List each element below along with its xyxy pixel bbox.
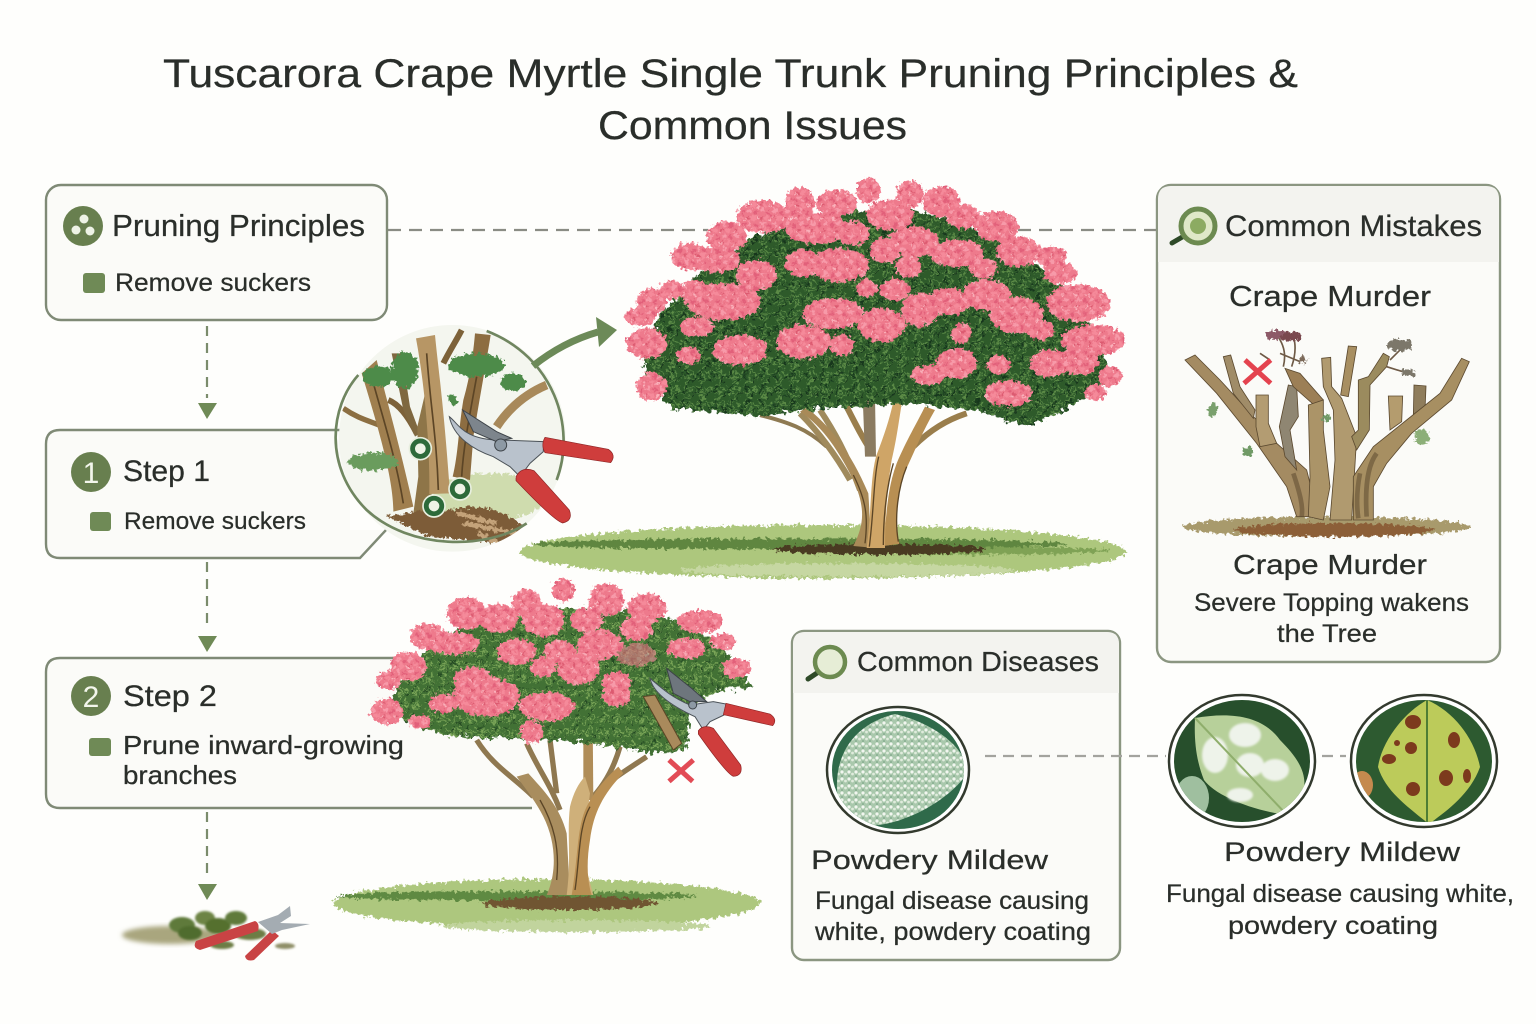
right description: Fungal disease causing white, bbox=[1166, 880, 1514, 908]
right description bbox=[1166, 880, 1514, 940]
red x mark bbox=[669, 760, 693, 781]
disease name: Powdery Mildew bbox=[811, 845, 1049, 875]
disease photo: leaf spot bbox=[1350, 695, 1498, 829]
dashed connector: diseases bbox=[985, 755, 1166, 757]
canopy flower clusters bbox=[373, 582, 748, 740]
ground: grass bbox=[520, 525, 1127, 578]
dashed connector: leaf to leaf bbox=[1322, 755, 1346, 757]
dashed connector: tree to mistakes bbox=[1018, 229, 1156, 231]
bullet square bbox=[90, 512, 111, 531]
heading: Common Mistakes bbox=[1225, 210, 1482, 243]
header band bbox=[1158, 186, 1499, 262]
bullet square bbox=[89, 738, 111, 756]
right description: powdery coating bbox=[1228, 912, 1438, 940]
description: white, powdery coating bbox=[814, 918, 1091, 946]
arrow: inset to tree bbox=[533, 317, 617, 366]
panel: step 2 bbox=[46, 658, 540, 808]
step 2 tree bbox=[333, 582, 775, 932]
disease photo: mildew leaf bbox=[1168, 695, 1316, 829]
panel: pruning principles bbox=[46, 185, 387, 320]
title: Tuscarora Crape Myrtle Single Trunk Pruning Principles & bbox=[163, 52, 1298, 96]
cut stems bbox=[1185, 346, 1469, 520]
heading: Common Diseases bbox=[857, 646, 1099, 677]
step 1 number: 1 bbox=[83, 457, 99, 490]
step 1 heading: Step 1 bbox=[123, 455, 210, 488]
bypass pruners bbox=[449, 410, 613, 523]
bullet square bbox=[83, 273, 105, 293]
mulch ground bbox=[1183, 517, 1470, 537]
trunks and branches bbox=[760, 377, 967, 548]
disease photo: powdery mildew bbox=[825, 705, 971, 835]
description: Fungal disease causing bbox=[815, 887, 1089, 915]
heading: Pruning Principles bbox=[112, 208, 365, 243]
title bbox=[163, 52, 1298, 148]
icon: three dots bbox=[63, 206, 103, 246]
dashed connector: principles to tree bbox=[388, 229, 708, 231]
arrow: step 1 to step 2 bbox=[198, 562, 217, 652]
canopy foliage bbox=[643, 208, 1110, 425]
illustration: topped tree bbox=[1183, 330, 1470, 537]
title: Common Issues bbox=[598, 104, 907, 148]
description bbox=[814, 887, 1091, 946]
step 1 number bbox=[71, 452, 111, 492]
arrow: principles to step 1 bbox=[198, 326, 217, 419]
header band bbox=[793, 632, 1119, 693]
description: the Tree bbox=[1277, 620, 1377, 648]
subheading: Crape Murder bbox=[1229, 281, 1431, 313]
description: Severe Topping wakens bbox=[1194, 589, 1469, 617]
step 2 number: 2 bbox=[83, 681, 99, 714]
arrow: step 2 to clippings bbox=[198, 812, 217, 900]
regrowth twigs bbox=[1260, 335, 1413, 375]
panel: common mistakes bbox=[1157, 185, 1500, 662]
inset background bbox=[339, 325, 566, 552]
regrowth tufts bbox=[1209, 330, 1429, 456]
step 2 heading: Step 2 bbox=[123, 680, 217, 713]
panel: common diseases bbox=[792, 631, 1120, 960]
cut branch bbox=[643, 695, 682, 750]
bullet text: Remove suckers bbox=[124, 508, 306, 535]
step 2 number bbox=[71, 676, 111, 716]
sucker markers bbox=[409, 438, 471, 517]
bullet text: branches bbox=[123, 760, 237, 790]
inset ring bbox=[336, 331, 564, 542]
ground: grass bbox=[333, 879, 760, 932]
inset circle: removing suckers bbox=[336, 325, 613, 552]
red x mark bbox=[1244, 360, 1271, 383]
bypass pruners bbox=[650, 668, 775, 776]
right disease name: Powdery Mildew bbox=[1224, 837, 1461, 867]
icon: magnifier bbox=[808, 647, 845, 679]
main flowering tree bbox=[520, 181, 1127, 578]
bullet text bbox=[123, 730, 404, 790]
subheading: Crape Murder bbox=[1233, 549, 1427, 580]
icon: clippings and pruners bbox=[122, 906, 310, 960]
bullet text: Remove suckers bbox=[115, 269, 311, 297]
bullet text: Prune inward-growing bbox=[123, 730, 404, 760]
bark shading bbox=[1293, 453, 1377, 518]
description bbox=[1194, 589, 1469, 648]
inset scene bbox=[343, 330, 547, 543]
icon: magnifier bbox=[1172, 209, 1215, 243]
canopy foliage bbox=[390, 609, 753, 753]
canopy flower clusters bbox=[628, 181, 1122, 403]
panel: step 1 bbox=[46, 430, 386, 558]
trunks and branches bbox=[477, 720, 647, 895]
